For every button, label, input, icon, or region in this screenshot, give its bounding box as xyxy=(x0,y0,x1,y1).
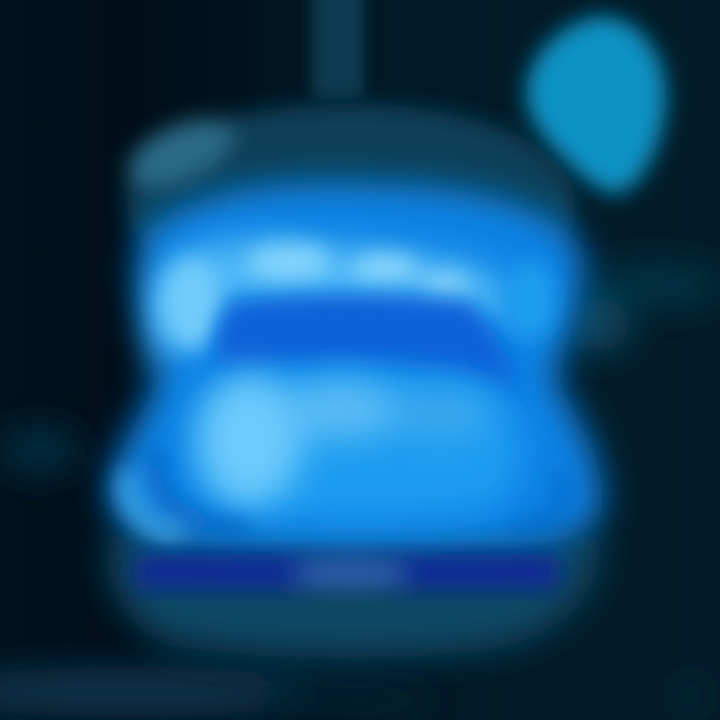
water drop xyxy=(526,17,666,194)
blue gum body xyxy=(110,183,602,552)
lower teeth highlights xyxy=(193,374,521,518)
lower gum ring xyxy=(127,450,564,536)
upper teeth highlights xyxy=(152,239,530,370)
dark blue tray band xyxy=(135,555,560,589)
lower dark base xyxy=(106,525,600,658)
upper cap xyxy=(118,104,575,250)
handle stem xyxy=(312,0,364,98)
floor glow xyxy=(0,263,720,718)
mouth dark band xyxy=(217,295,520,392)
